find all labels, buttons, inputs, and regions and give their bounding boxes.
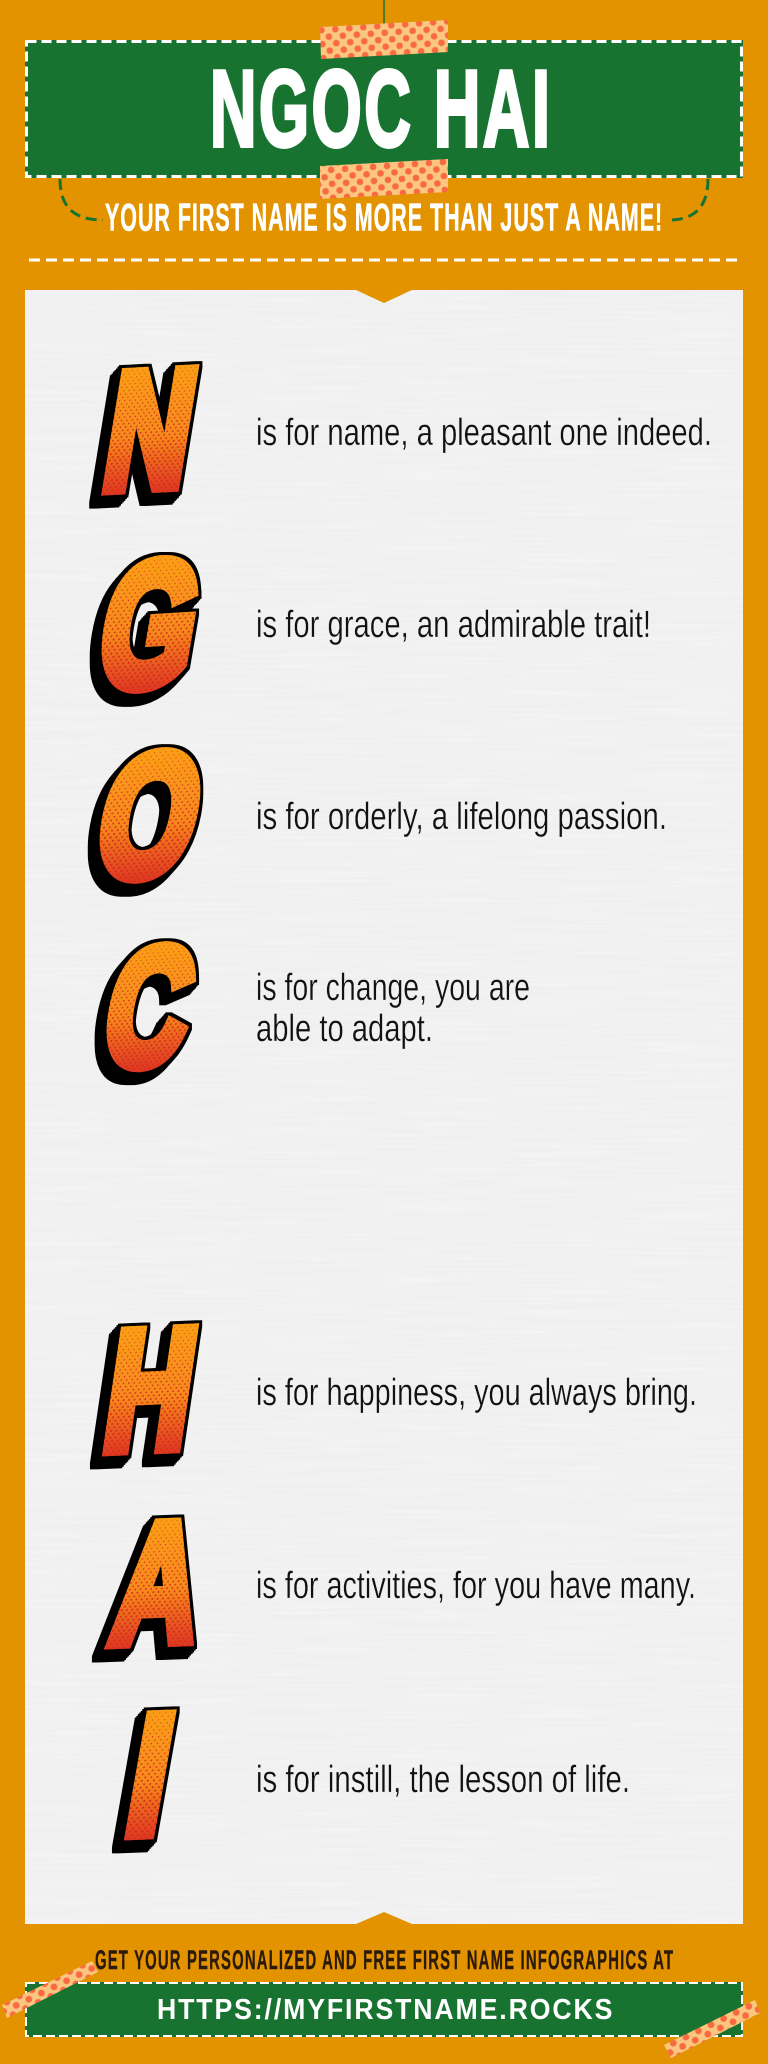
tape: footer left bbox=[2, 1961, 98, 2018]
text: C: is for change, you are bbox=[256, 967, 530, 1009]
footer banner bbox=[25, 1982, 743, 2037]
dashed connector: left bbox=[60, 179, 103, 220]
url: HTTPS://MYFIRSTNAME.ROCKS bbox=[157, 1993, 612, 2025]
title banner bbox=[25, 40, 743, 178]
letter A: A bbox=[103, 1486, 214, 1679]
letter C: C bbox=[92, 912, 207, 1102]
subtitle: YOUR FIRST NAME IS MORE THAN JUST A NAME! bbox=[105, 196, 662, 239]
tape: under title bbox=[320, 159, 448, 199]
text: G: is for grace, an admirable trait! bbox=[256, 604, 651, 646]
tape: top bbox=[320, 20, 448, 59]
tape: footer right bbox=[664, 2000, 760, 2058]
green hanging line bbox=[383, 0, 385, 24]
panel: letters bbox=[25, 290, 743, 1924]
letter H: H bbox=[94, 1294, 207, 1487]
footer call to action: GET YOUR PERSONALIZED AND FREE FIRST NAME INFOGRAPHICS AT bbox=[95, 1944, 674, 1975]
text: C: able to adapt. bbox=[256, 1008, 433, 1050]
text: I: is for instill, the lesson of life. bbox=[256, 1759, 630, 1801]
letter I: I bbox=[115, 1679, 186, 1870]
title: NGOC HAI bbox=[210, 47, 550, 169]
text: C bbox=[256, 967, 530, 1050]
dashed connector: right bbox=[669, 179, 708, 220]
letter N: N bbox=[93, 334, 208, 525]
letter G: G bbox=[87, 524, 214, 726]
letter O: O bbox=[84, 716, 216, 916]
